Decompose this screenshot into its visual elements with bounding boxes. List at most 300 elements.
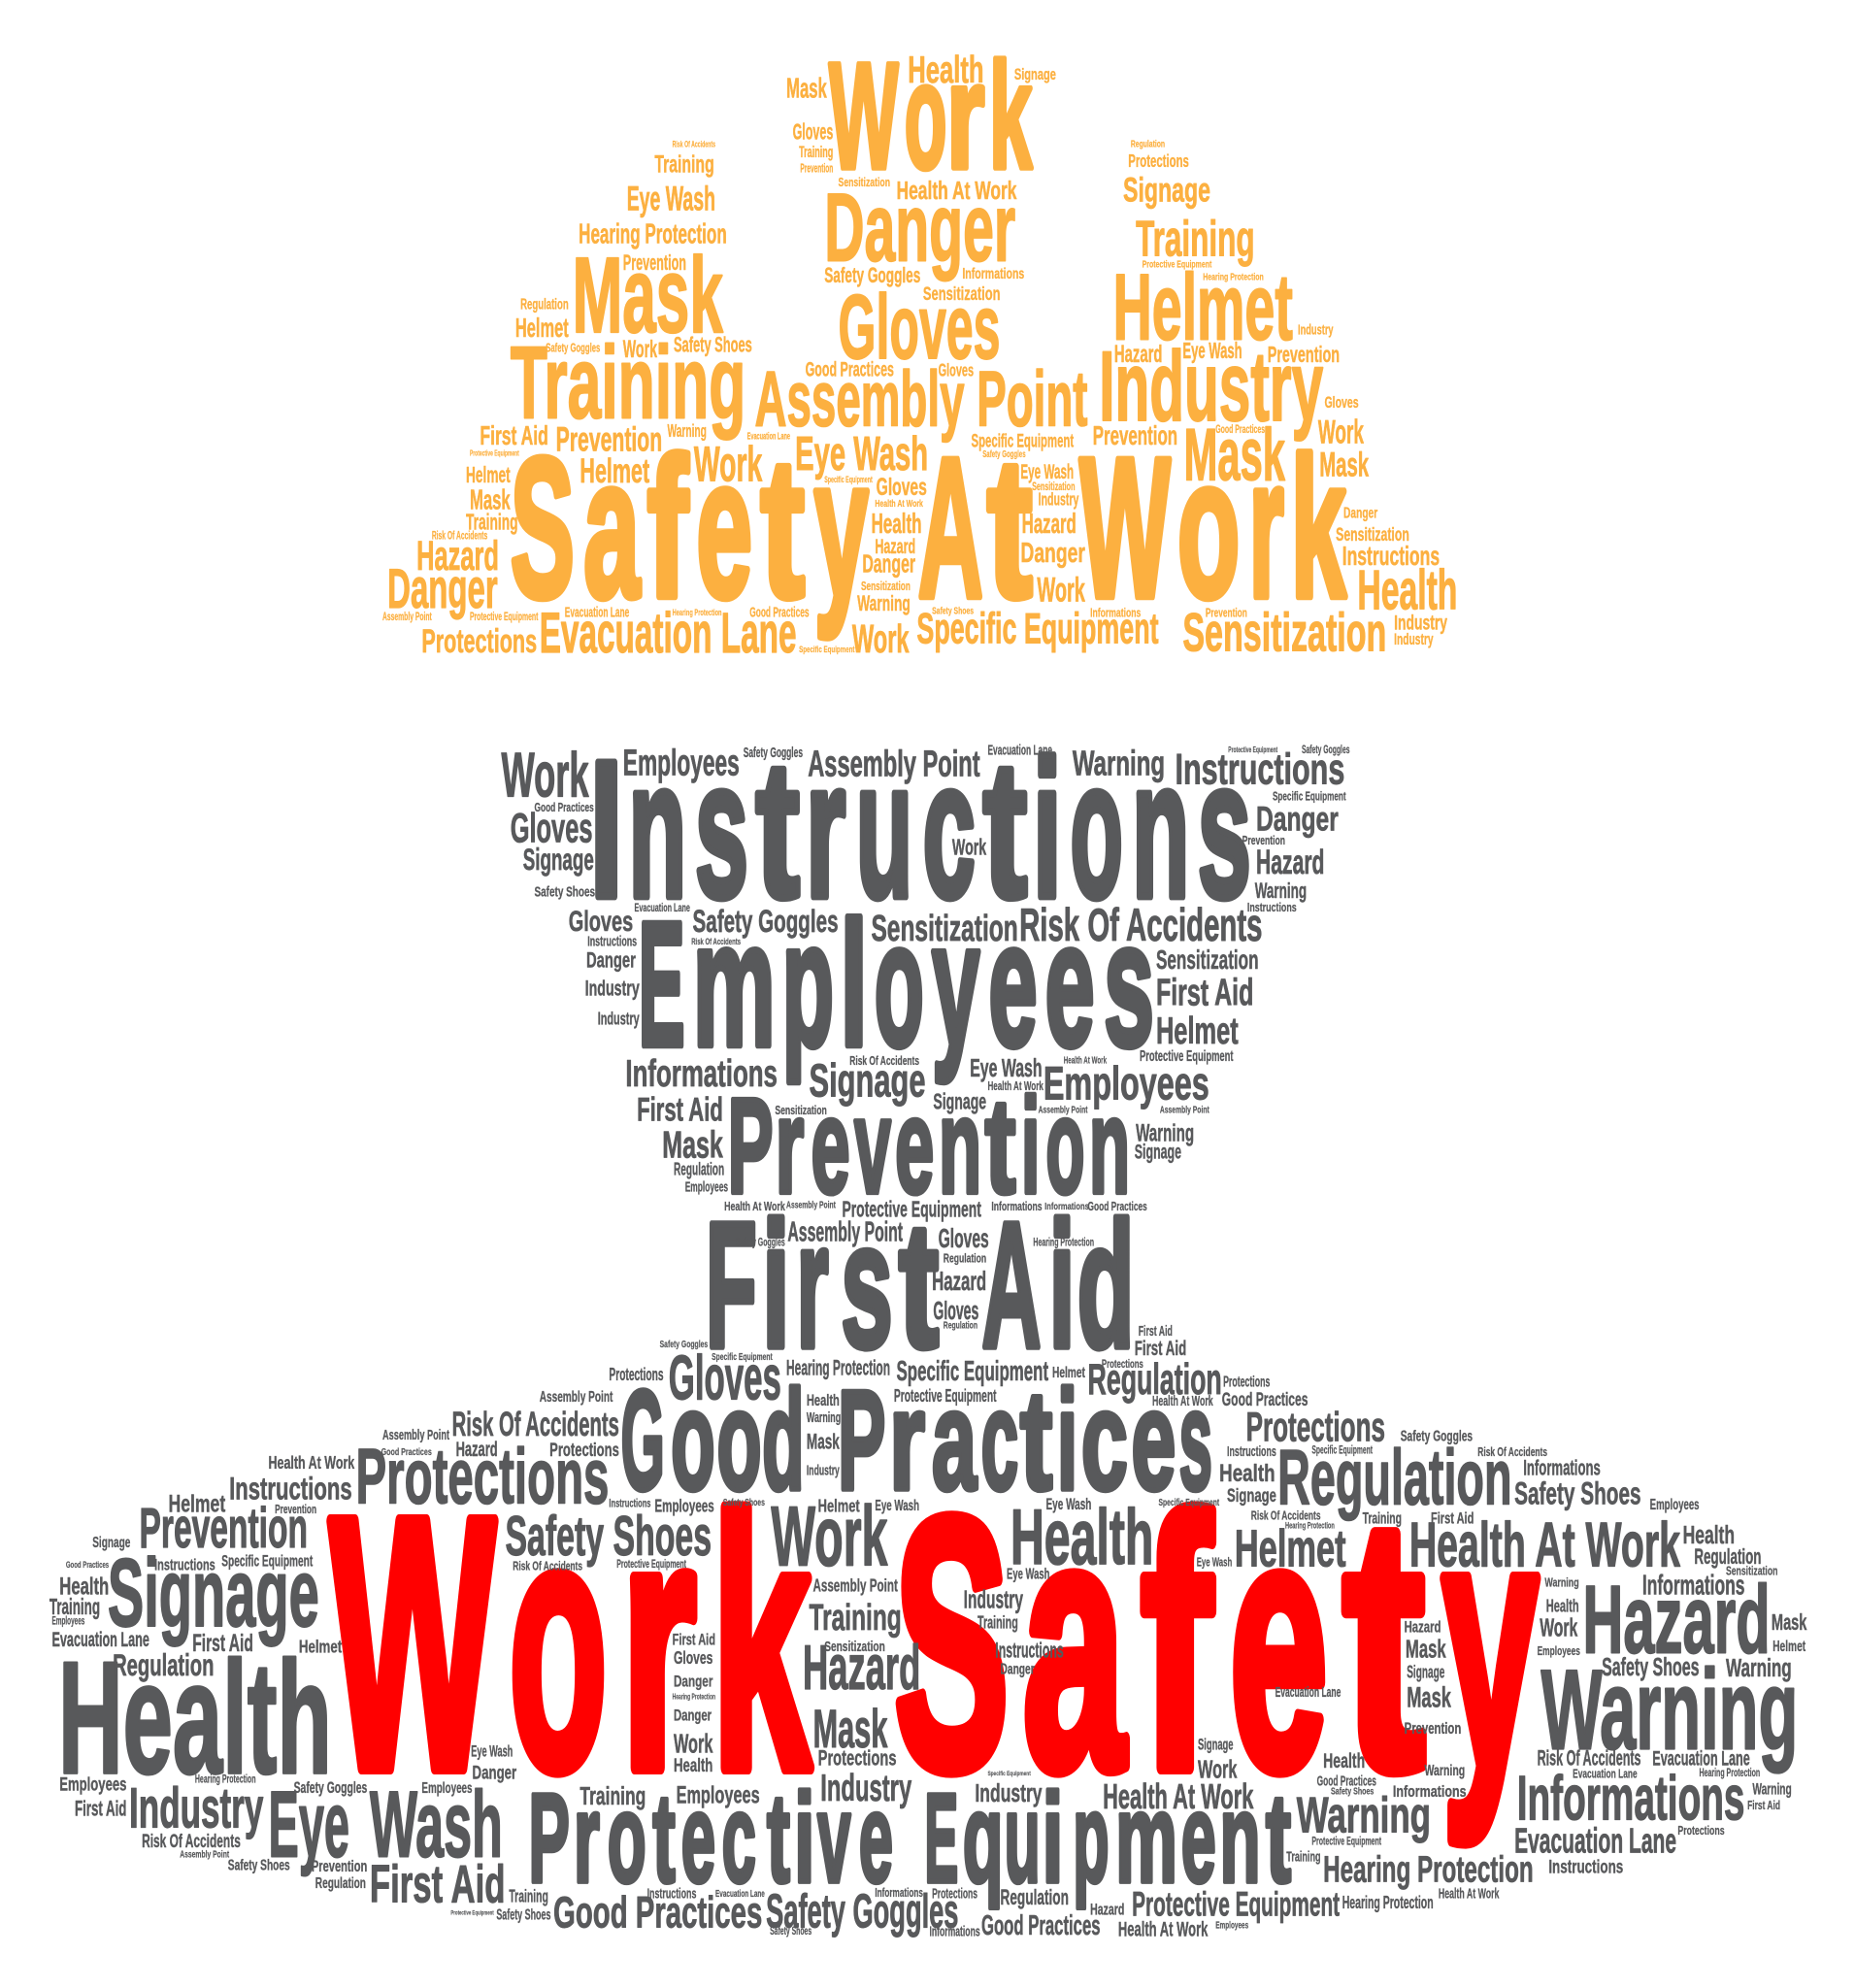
hard hat: orange word cloud: Training <box>654 151 714 178</box>
head: grey word cloud: Protective Equipment <box>842 1197 981 1222</box>
hard hat: orange word cloud: Work <box>694 437 763 492</box>
body: grey word cloud: Hearing Protection <box>195 1773 255 1786</box>
body: grey word cloud: Informations <box>1642 1570 1745 1601</box>
hard hat: orange word cloud: Risk Of Accidents <box>673 139 715 149</box>
body: grey word cloud: Mask <box>807 1429 840 1453</box>
word: Good: o <box>671 1361 715 1519</box>
hard hat: orange word cloud: Hazard <box>416 533 499 580</box>
head: grey word cloud: Assembly Point <box>786 1200 836 1210</box>
hard hat: orange word cloud: Work <box>1318 414 1364 451</box>
body: grey word cloud: Protections <box>609 1364 664 1384</box>
body: grey word cloud: Hearing Protection <box>673 1693 715 1702</box>
body: grey word cloud: Work <box>771 1488 888 1583</box>
word: Protective: o <box>608 1767 646 1908</box>
body: grey word cloud: Eye Wash <box>1197 1555 1232 1570</box>
head: grey word cloud: Prevention <box>1242 833 1285 847</box>
body: grey word cloud: Evacuation Lane <box>1652 1747 1750 1770</box>
body: grey word cloud: Health At Work <box>1409 1509 1680 1580</box>
body: grey word cloud: Protections <box>932 1886 977 1902</box>
head: grey word cloud: Assembly Point <box>1160 1106 1209 1116</box>
body: grey word cloud: Good Practices <box>981 1910 1101 1941</box>
hard hat: orange word cloud: Hazard <box>875 536 915 558</box>
body: grey word cloud: Safety Goggles <box>294 1778 367 1797</box>
body: grey word cloud: Informations <box>875 1885 923 1900</box>
word: Prevention: e <box>811 1071 850 1222</box>
hard hat: orange word cloud: Prevention <box>800 160 833 175</box>
body: grey word cloud: Regulation <box>113 1648 214 1682</box>
hard hat: orange word cloud: Gloves <box>939 359 974 380</box>
body: grey word cloud: Warning <box>1544 1574 1579 1589</box>
body: grey word cloud: Helmet <box>818 1496 860 1516</box>
body: grey word cloud: Employees <box>1650 1497 1700 1513</box>
hard hat: orange word cloud: Health At Work <box>897 176 1017 205</box>
hard hat: orange word cloud: Protective Equipment <box>1143 259 1212 270</box>
body: grey word cloud: Gloves <box>669 1342 781 1412</box>
head: grey word cloud: Signage <box>810 1055 926 1108</box>
word: Work (top): k <box>989 31 1033 200</box>
body: grey word cloud: Regulation <box>1694 1544 1761 1569</box>
hard hat: orange word cloud: Assembly Point <box>754 355 1088 443</box>
word: Protective: i <box>794 1767 815 1908</box>
head: grey word cloud: Gloves <box>511 805 592 851</box>
word: Employees: E <box>639 885 685 1083</box>
hard hat: orange word cloud: Hazard <box>1114 342 1162 368</box>
word: Employees: p <box>782 885 834 1083</box>
word: Protective: v <box>817 1767 851 1908</box>
hard hat: orange word cloud: Industry <box>1039 488 1079 509</box>
body: grey word cloud: Assembly Point <box>540 1389 613 1406</box>
hard hat: orange word cloud: Specific Equipment <box>824 475 873 484</box>
body: grey word cloud: Health At Work <box>1103 1776 1254 1816</box>
body: grey word cloud: Regulation <box>1088 1356 1222 1404</box>
hard hat: orange word cloud: y <box>814 417 869 639</box>
body: grey word cloud: Assembly Point <box>812 1575 898 1596</box>
hard hat: orange word cloud: Good Practices <box>749 605 810 620</box>
word: Prevention: v <box>854 1071 891 1222</box>
hard hat: orange word cloud: Work <box>1037 572 1085 610</box>
body: grey word cloud: Informations <box>929 1925 980 1940</box>
hard hat: orange word cloud: Safety Goggles <box>546 341 600 355</box>
word: Prevention: n <box>939 1071 981 1222</box>
hard hat: orange word cloud: Safety Shoes <box>674 333 752 357</box>
head: grey word cloud: Safety Goggles <box>744 746 803 761</box>
body: grey word cloud: Helmet <box>1052 1365 1085 1381</box>
head: grey word cloud: Employees <box>623 743 740 783</box>
body: grey word cloud: Training <box>509 1885 548 1905</box>
body: grey word cloud: Instructions <box>154 1556 215 1574</box>
body: grey word cloud: Eye Wash <box>1007 1567 1049 1583</box>
body: grey word cloud: Training <box>1363 1508 1402 1527</box>
word: Equipment: m <box>1115 1767 1177 1908</box>
body: grey word cloud: Work <box>1540 1612 1578 1641</box>
body: grey word cloud: Regulation <box>1277 1435 1511 1522</box>
body: grey word cloud: Mask <box>812 1698 888 1759</box>
head: grey word cloud: Risk Of Accidents <box>849 1053 919 1068</box>
body: grey word cloud: Mask <box>1407 1681 1451 1713</box>
body: grey word cloud: Evacuation Lane <box>715 1889 765 1900</box>
body: grey word cloud: Danger <box>473 1763 516 1784</box>
word: Safety: t <box>760 417 805 639</box>
head: grey word cloud: s <box>1198 720 1251 939</box>
head: grey word cloud: First Aid <box>1156 973 1253 1014</box>
head: grey word cloud: Evacuation Lane <box>635 902 690 914</box>
word: At: A <box>918 417 983 639</box>
body: grey word cloud: Instructions <box>1548 1856 1623 1877</box>
body: grey word cloud: Safety Shoes <box>505 1506 712 1568</box>
head: grey word cloud: Industry <box>598 1008 640 1028</box>
hard hat: orange word cloud: Helmet <box>515 313 569 343</box>
word cloud: worker silhouette: y <box>1441 1444 1540 1846</box>
hard hat: orange word cloud: Warning <box>857 591 911 615</box>
hard hat: orange word cloud: Sensitization <box>1182 601 1386 662</box>
word: Instructions: u <box>856 720 912 939</box>
body: grey word cloud: First Aid <box>192 1631 253 1657</box>
head: grey word cloud: Informations <box>1044 1202 1089 1212</box>
hard hat: orange word cloud: Prevention <box>1093 420 1177 450</box>
body: grey word cloud: Industry <box>975 1778 1043 1807</box>
head: grey word cloud: Informations <box>991 1199 1043 1213</box>
body: grey word cloud: Training <box>810 1598 902 1639</box>
hard hat: orange word cloud: Training <box>799 143 833 161</box>
word: Protective: c <box>722 1767 756 1908</box>
hard hat: orange word cloud: Helmet <box>580 452 649 490</box>
word: Instructions: o <box>1071 720 1123 939</box>
word: Equipment: p <box>1073 1767 1110 1908</box>
head: grey word cloud: First Aid <box>1135 1338 1186 1360</box>
head: grey word cloud: Risk Of Accidents <box>1019 899 1263 950</box>
body: grey word cloud: Protective Equipment <box>450 1909 494 1916</box>
body: grey word cloud: Work <box>674 1728 713 1758</box>
body: grey word cloud: Safety Shoes <box>1514 1475 1641 1511</box>
hard hat: orange word cloud: Hearing Protection <box>673 608 722 617</box>
word: Instructions: t <box>983 720 1027 939</box>
word: Protective: t <box>767 1767 790 1908</box>
body: grey word cloud: Employees <box>1215 1921 1248 1932</box>
head: grey word cloud: n <box>1089 1071 1130 1222</box>
hard hat: orange word cloud: Informations <box>1090 605 1141 619</box>
hard hat: orange word cloud: Health <box>1357 559 1457 621</box>
body: grey word cloud: Health At Work <box>1118 1919 1209 1941</box>
head: grey word cloud: Employees <box>685 1179 728 1195</box>
head: grey word cloud: Evacuation Lane <box>987 743 1052 758</box>
head: grey word cloud: Instructions <box>587 934 637 949</box>
body: grey word cloud: Safety Shoes <box>228 1858 290 1874</box>
head: grey word cloud: Instructions <box>1176 746 1344 793</box>
body: grey word cloud: d <box>762 1361 805 1519</box>
word: Safety (red): e <box>1230 1444 1328 1844</box>
head: grey word cloud: Danger <box>1256 801 1339 839</box>
body: grey word cloud: Informations <box>1523 1456 1601 1480</box>
body: grey word cloud: Instructions <box>1227 1444 1276 1460</box>
word: Work: W <box>1079 417 1171 639</box>
body: grey word cloud: Signage <box>1198 1736 1234 1754</box>
body: grey word cloud: Evacuation Lane <box>1275 1685 1341 1701</box>
body: grey word cloud: Industry <box>820 1768 911 1809</box>
body: grey word cloud: First Aid <box>673 1630 715 1648</box>
word: Good: o <box>716 1361 762 1519</box>
body: grey word cloud: Assembly Point <box>382 1428 449 1443</box>
body: grey word cloud: Employees <box>654 1496 714 1516</box>
body: grey word cloud: Instructions <box>995 1639 1064 1663</box>
body: grey word cloud: Good Practices <box>553 1887 762 1937</box>
head: grey word cloud: Sensitization <box>871 909 1018 949</box>
hard hat: orange word cloud: Informations <box>962 266 1024 282</box>
body: grey word cloud: Regulation <box>315 1875 366 1892</box>
body: grey word cloud: Informations <box>1393 1782 1467 1801</box>
hard hat: orange word cloud: Industry <box>1394 630 1434 648</box>
body: grey word cloud: Industry <box>964 1585 1023 1614</box>
body: grey word cloud: Safety Goggles <box>1401 1428 1473 1444</box>
body: grey word cloud: e <box>859 1767 893 1908</box>
word: Instructions: n <box>628 720 686 939</box>
body: grey word cloud: First Aid <box>370 1853 505 1913</box>
word: Employees: m <box>693 885 776 1083</box>
hard hat: orange word cloud: Prevention <box>623 250 686 275</box>
hard hat: orange word cloud: Regulation <box>520 296 569 313</box>
body: grey word cloud: Signage <box>1227 1485 1276 1507</box>
hard hat: orange word cloud: Mask <box>470 484 511 515</box>
hard hat: orange word cloud: Sensitization <box>923 283 1001 305</box>
hard hat: orange word cloud: Specific Equipment <box>799 645 854 654</box>
word: Instructions: s <box>695 720 748 939</box>
body: grey word cloud: Hearing Protection <box>1342 1892 1434 1912</box>
head: grey word cloud: Regulation <box>944 1320 977 1331</box>
head: grey word cloud: Risk Of Accidents <box>691 937 741 946</box>
head: grey word cloud: Gloves <box>939 1223 989 1253</box>
word: Work (top): o <box>905 31 946 200</box>
head: grey word cloud: Sensitization <box>775 1103 827 1117</box>
word: Work (red): W <box>330 1444 497 1844</box>
hard hat: orange word cloud: Signage <box>1123 171 1210 209</box>
head: grey word cloud: Warning <box>1073 743 1165 782</box>
word: Practices: i <box>1057 1361 1077 1519</box>
body: grey word cloud: Warning <box>1752 1779 1792 1798</box>
word: Practices: P <box>838 1361 885 1519</box>
hard hat: orange word cloud: Danger <box>1020 538 1085 569</box>
head: grey word cloud: Regulation <box>944 1251 986 1266</box>
body: grey word cloud: Helmet <box>1772 1639 1806 1655</box>
body: grey word cloud: Protections <box>818 1745 897 1770</box>
word: Equipment: u <box>1005 1767 1041 1908</box>
head: grey word cloud: Safety Goggles <box>660 1340 708 1350</box>
word: Instructions: i <box>1033 720 1062 939</box>
word: Work: k <box>1291 417 1346 639</box>
hard hat: orange word cloud <box>382 31 1457 665</box>
body: grey word cloud: Mask <box>1772 1609 1807 1635</box>
body: grey word cloud: Health At Work <box>269 1452 355 1473</box>
body: grey word cloud: Assembly Point <box>180 1850 229 1861</box>
body: grey word cloud: Safety Goggles <box>766 1883 958 1938</box>
head: grey word cloud: Hazard <box>932 1266 986 1296</box>
body: grey word cloud: Protective Equipment <box>894 1385 997 1406</box>
word: Safety (red): f <box>1141 1444 1214 1844</box>
body: grey word cloud: Health <box>59 1574 109 1600</box>
hard hat: orange word cloud: Training <box>466 509 518 534</box>
word: Practices: a <box>932 1361 977 1519</box>
hard hat: orange word cloud: Sensitization <box>861 579 911 593</box>
hard hat: orange word cloud: Signage <box>1014 65 1056 83</box>
head: grey word cloud <box>502 720 1350 1384</box>
hard hat: orange word cloud: Protective Equipment <box>470 449 519 458</box>
word: Prevention: t <box>985 1071 1016 1222</box>
body: grey word cloud: Prevention <box>139 1497 308 1560</box>
word: Work (red): k <box>712 1444 812 1844</box>
body: grey word cloud: Hazard <box>803 1632 920 1703</box>
body: grey word cloud: Risk Of Accidents <box>452 1406 619 1443</box>
hard hat: orange word cloud: Hearing Protection <box>579 218 727 249</box>
hard hat: orange word cloud: Gloves <box>877 475 927 501</box>
head: grey word cloud: Warning <box>1136 1120 1194 1146</box>
hard hat: orange word cloud: Gloves <box>839 276 1001 378</box>
word: Employees: l <box>840 885 868 1083</box>
head: grey word cloud: Hazard <box>1256 844 1324 881</box>
head: grey word cloud: Helmet <box>1156 1011 1239 1052</box>
head: grey word cloud: Gloves <box>569 906 633 938</box>
head: grey word cloud: Safety Shoes <box>534 885 595 901</box>
word: Equipment: e <box>1181 1767 1216 1908</box>
word: Work: r <box>1249 417 1284 639</box>
hard hat: orange word cloud: Danger <box>862 549 915 579</box>
body: grey word cloud: Protective Equipment <box>616 1558 686 1571</box>
body: grey word cloud: Hearing Protection <box>1700 1767 1760 1779</box>
word: Practices: r <box>889 1361 925 1519</box>
head: grey word cloud: Danger <box>586 948 636 973</box>
body: grey word cloud: Specific Equipment <box>897 1356 1048 1387</box>
word: Prevention: r <box>776 1071 804 1222</box>
head: grey word cloud: First Aid <box>637 1091 723 1128</box>
word: Instructions: I <box>589 720 623 939</box>
word: Employees: s <box>1104 885 1154 1083</box>
head: grey word cloud: Gloves <box>933 1296 978 1325</box>
hard hat: orange word cloud: Gloves <box>793 119 833 145</box>
body: grey word cloud: Eye Wash <box>1045 1495 1091 1513</box>
body: grey word cloud: Protective Equipment <box>1132 1886 1340 1924</box>
body: grey word cloud: Employees <box>677 1783 760 1809</box>
head: grey word cloud: Employees <box>1043 1057 1209 1110</box>
hard hat: orange word cloud: Training <box>511 325 745 440</box>
word: Instructions: c <box>923 720 976 939</box>
body: grey word cloud: Risk Of Accidents <box>1251 1508 1321 1522</box>
hard hat: orange word cloud: Safety Goggles <box>982 449 1026 460</box>
head: grey word cloud: Regulation <box>674 1159 724 1179</box>
body: grey word cloud: Hearing Protection <box>786 1356 890 1380</box>
word: First: F <box>706 1185 757 1384</box>
word: Instructions: t <box>755 720 800 939</box>
hard hat: orange word cloud: Prevention <box>1268 342 1340 367</box>
head: grey word cloud: Protective Equipment <box>1140 1048 1234 1065</box>
hard hat: orange word cloud: Protective Equipment <box>470 611 538 623</box>
hard hat: orange word cloud: Training <box>1136 212 1255 268</box>
body: grey word cloud: Health <box>807 1391 840 1409</box>
body: grey word cloud: Training <box>977 1612 1018 1633</box>
hard hat: orange word cloud: Industry <box>1298 322 1334 338</box>
body: grey word cloud: Employees <box>421 1780 473 1797</box>
body: grey word cloud: Hazard <box>456 1439 498 1461</box>
hard hat: orange word cloud: Mask <box>1319 446 1369 483</box>
body: grey word cloud: Sensitization <box>1726 1564 1777 1578</box>
body: grey word cloud: Specific Equipment <box>1311 1444 1373 1457</box>
word: Employees: o <box>875 885 924 1083</box>
head: grey word cloud: Safety Goggles <box>736 1237 785 1249</box>
body: grey word cloud: Safety Shoes <box>770 1925 812 1938</box>
hard hat: orange word cloud: Prevention <box>1206 605 1247 619</box>
word: Work (top): r <box>946 31 984 200</box>
body: grey word cloud: Hearing Protection <box>1285 1520 1335 1530</box>
hard hat: orange word cloud: Evacuation Lane <box>540 602 796 665</box>
hard hat: orange word cloud: Safety Goggles <box>824 263 920 287</box>
head: grey word cloud: Specific Equipment <box>712 1352 773 1363</box>
word: Protective: r <box>574 1767 600 1908</box>
head: grey word cloud: Safety Goggles <box>1302 744 1350 756</box>
body: grey word cloud: Protections <box>356 1433 609 1520</box>
hard hat: orange word cloud: Health <box>908 50 984 91</box>
word: First: s <box>841 1185 893 1384</box>
hard hat: orange word cloud: Mask <box>573 236 723 355</box>
hard hat: orange word cloud: Danger <box>387 558 498 620</box>
body: grey word cloud: Health <box>1219 1461 1275 1487</box>
body: grey word cloud: Training <box>1286 1850 1321 1866</box>
body: grey word cloud: Evacuation Lane <box>1573 1766 1638 1780</box>
word: Practices: e <box>1131 1361 1176 1519</box>
head: grey word cloud: Work <box>952 835 987 860</box>
body: grey word cloud: Eye Wash <box>875 1498 919 1514</box>
body: grey word cloud: Safety Shoes <box>723 1498 765 1508</box>
body: grey word cloud: Danger <box>674 1673 713 1691</box>
head: grey word cloud: Protective Equipment <box>1228 746 1277 754</box>
head: grey word cloud: Assembly Point <box>1039 1106 1088 1116</box>
hard hat: orange word cloud: Protections <box>1128 150 1189 171</box>
body: grey word cloud: Signage <box>1407 1661 1444 1681</box>
body: grey word cloud: Wash <box>370 1773 503 1876</box>
hard hat: orange word cloud: Evacuation Lane <box>565 605 629 620</box>
body: grey word cloud: Risk Of Accidents <box>1538 1745 1641 1770</box>
head: grey word cloud: Good Practices <box>1088 1199 1147 1213</box>
body: grey word cloud: Health <box>1683 1520 1735 1549</box>
hard hat: orange word cloud: Work <box>623 337 657 363</box>
hard hat: orange word cloud: Eye Wash <box>627 181 715 218</box>
body: grey word cloud: Hazard <box>1405 1617 1441 1636</box>
body: grey word cloud: Protections <box>1246 1404 1385 1450</box>
body: grey word cloud: Prevention <box>1405 1719 1461 1738</box>
body: grey word cloud: Eye <box>269 1773 349 1876</box>
body: grey word cloud: Safety Shoes <box>1331 1786 1374 1797</box>
hard hat: orange word cloud: Gloves <box>1324 393 1359 412</box>
body: grey word cloud: Warning <box>1297 1788 1431 1844</box>
body: grey word cloud: First Aid <box>1431 1508 1474 1527</box>
hard hat: orange word cloud: Hearing Protection <box>1203 272 1264 282</box>
head: grey word cloud: Good Practices <box>534 800 594 814</box>
word: Safety: f <box>647 417 688 639</box>
body: grey word cloud: Health <box>1323 1750 1365 1773</box>
head: grey word cloud: Assembly Point <box>808 745 980 785</box>
hard hat: orange word cloud: Eye Wash <box>795 426 928 480</box>
word: Equipment: n <box>1219 1767 1261 1908</box>
word: Equipment: t <box>1266 1767 1291 1908</box>
word: Employees: y <box>932 885 979 1083</box>
hard hat: orange word cloud: Sensitization <box>1336 524 1409 546</box>
hard hat: orange word cloud: Good Practices <box>806 358 894 381</box>
body: grey word cloud: Specific Equipment <box>1159 1498 1220 1508</box>
word: Safety: a <box>583 417 641 639</box>
body: grey word cloud: Safety Shoes <box>496 1907 551 1924</box>
body: grey word cloud: Warning <box>1726 1653 1792 1682</box>
body: grey word cloud: Health At Work <box>1152 1394 1213 1409</box>
head: grey word cloud: First Aid <box>1139 1324 1173 1340</box>
hard hat: orange word cloud: Specific Equipment <box>916 606 1159 653</box>
hard hat: orange word cloud: Assembly Point <box>382 611 432 623</box>
hard hat: orange word cloud: Industry <box>1394 612 1447 634</box>
word: Aid: d <box>1077 1185 1135 1384</box>
